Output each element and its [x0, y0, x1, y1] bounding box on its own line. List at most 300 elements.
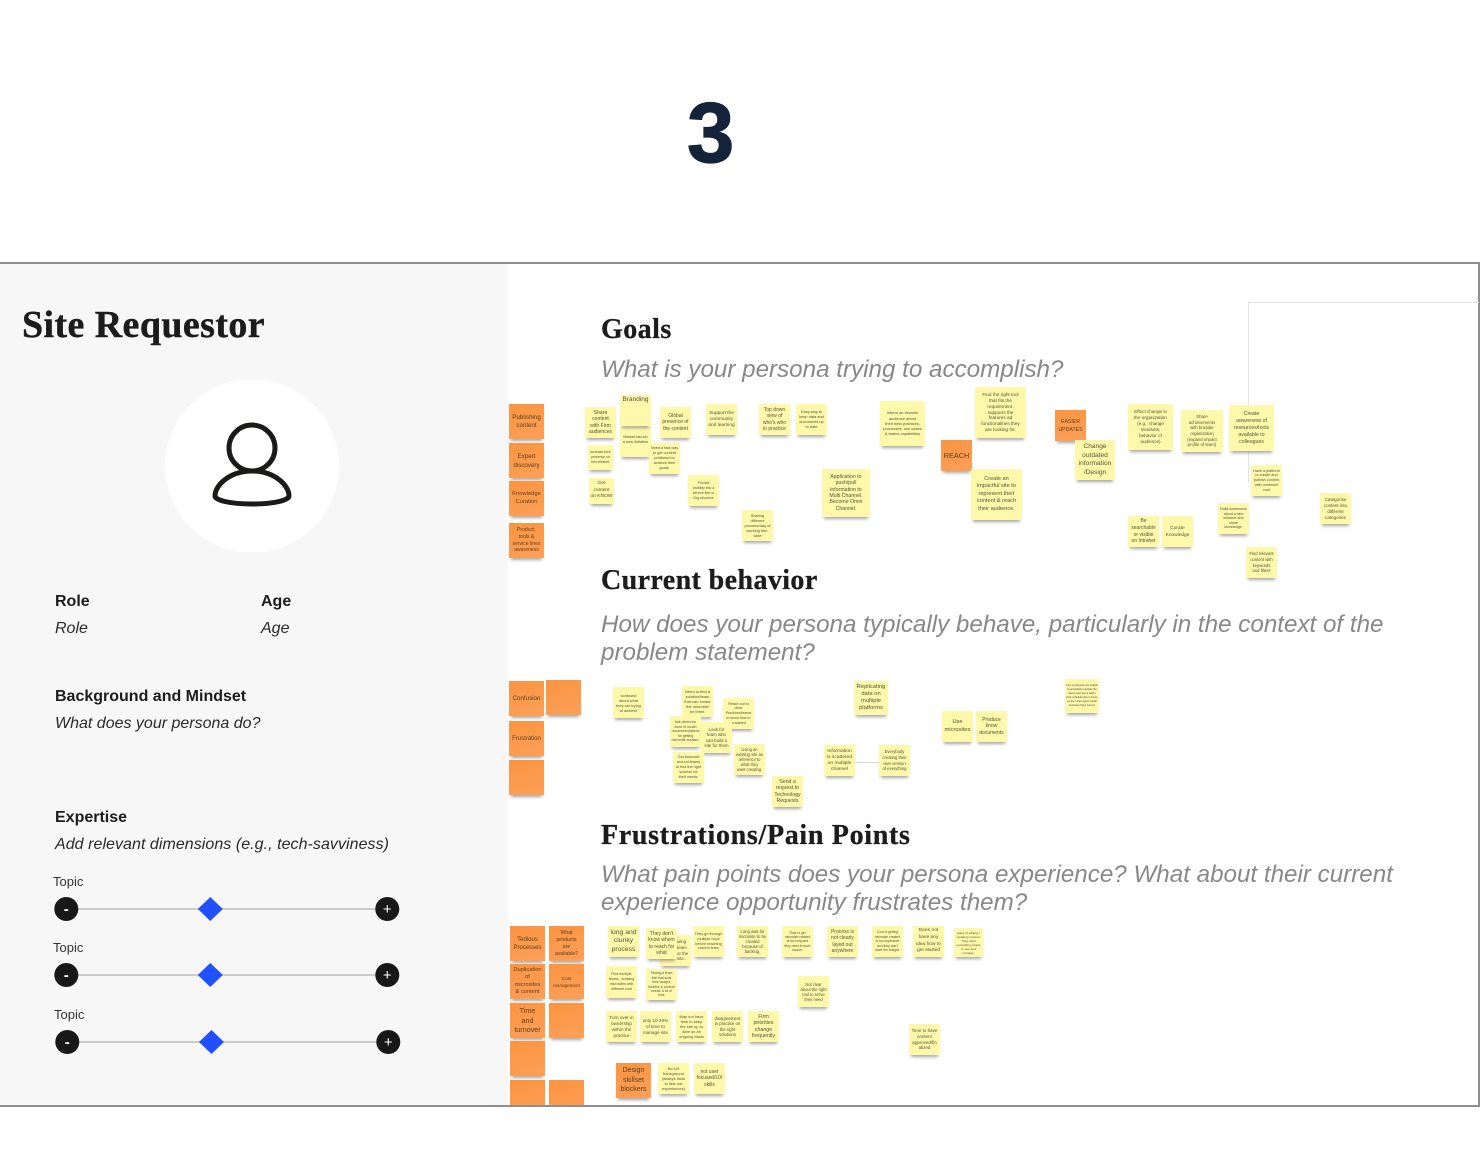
sticky: Finding a team: their budget, — [652, 980, 671, 984]
sticky: only 10-20%: only 10-20% — [643, 1018, 668, 1022]
sticky: Expert discovery: Expert — [518, 452, 535, 460]
sticky: Confusion — [509, 681, 544, 716]
sticky: Reach out: st started — [731, 721, 746, 725]
sticky: Look for team — [701, 722, 732, 753]
sticky: Easy way — [796, 404, 827, 435]
sticky: No UX background: in lists not — [665, 1081, 682, 1086]
text: behavior prompt: How does your persona typically behave, particularly in the context of the problem statement? — [601, 611, 1384, 666]
sticky: Duplication — [510, 964, 545, 999]
sticky: Effect change: mindsets, — [1141, 427, 1160, 432]
sticky: Find multiple teams: microsites with — [610, 982, 633, 986]
sticky: Share content: content — [592, 416, 609, 422]
sticky: May not have time: the site up to — [680, 1024, 703, 1029]
sticky: They go through: before reaching — [695, 942, 722, 946]
sticky: Build awareness: initiative and — [1224, 516, 1243, 520]
sticky: Time and turnover: and — [522, 1016, 534, 1025]
sticky: Ease of editing: something simple — [956, 942, 981, 946]
sticky: Product awareness — [509, 523, 544, 558]
sticky: Curate Knowledge: Curate — [1170, 526, 1185, 530]
sticky: Change outdated: information — [1079, 460, 1111, 467]
sticky: Find the right tool: features ad — [989, 415, 1012, 420]
sticky: Find the right tool: are looking for. — [985, 427, 1016, 432]
sticky: Cost of getting: Cost of getting — [877, 930, 898, 934]
label: topic 2: Topic — [53, 940, 83, 955]
sticky: Provide visibility: service line or — [693, 490, 714, 494]
sticky: long and clunky: clunky — [614, 937, 633, 944]
sticky: Send a request: request to — [776, 785, 799, 791]
sticky: blank orange — [510, 1080, 545, 1115]
sticky: Not clear — [798, 976, 829, 1007]
sticky: Need to find: that can create — [684, 699, 711, 704]
sticky: Find relevant content: Find relevant — [1249, 551, 1274, 556]
sticky: Reach out: to know how to — [726, 716, 750, 720]
sticky: tiny note: their schedule due to focus — [1066, 696, 1098, 699]
sticky: Be searchable: on Intranet — [1132, 538, 1155, 544]
sticky: Time and turnover: Time — [520, 1006, 535, 1015]
sticky: Inform audience: Inform an broader — [887, 410, 918, 415]
sticky: Get bounced: to find the right — [676, 765, 701, 769]
sticky: May not have time: date on an — [682, 1029, 701, 1034]
sticky: Duplication: microsites — [515, 982, 540, 988]
sticky: Share content: Share — [594, 410, 607, 416]
sticky: tiny note — [1065, 679, 1099, 713]
sticky: Design skillset blockers: Design — [623, 1067, 644, 1074]
sticky: blank orange — [549, 1003, 584, 1038]
sticky: Long wait: Long wait for — [740, 929, 764, 934]
sticky: Inform audience — [880, 401, 925, 446]
sticky: Firm priorities: Firm — [758, 1014, 769, 1020]
sticky: Does not have any idea: idea how to — [916, 942, 941, 946]
sticky: disagreement: disagreement — [714, 1016, 741, 1020]
sticky: Long wait: because of — [742, 944, 763, 949]
sticky: Reach out: Practices/teams — [726, 711, 751, 715]
sticky: Have a platform: with minimum — [1255, 483, 1278, 487]
sticky: Find multiple teams — [606, 966, 637, 998]
sticky: They don't know — [646, 928, 677, 959]
slider: topic 1: - — [64, 901, 69, 918]
sticky: Publishing content: Publishing — [512, 414, 541, 420]
sticky: Turn over: ownership — [611, 1020, 632, 1026]
sticky: They don't know: know whom — [648, 937, 675, 943]
sticky: team note behind: or the — [677, 950, 688, 956]
sticky: Curate Knowledge: Knowledge — [1166, 532, 1189, 538]
sticky: Long wait: backlog. — [745, 949, 760, 954]
sticky: Share content: with Firm — [590, 422, 611, 428]
sticky: Cost management: Cost — [562, 976, 571, 980]
sticky: Does not have any idea: get started — [917, 948, 940, 953]
sticky: Time to get — [782, 926, 813, 957]
sticky: confused: to achieve — [620, 708, 637, 712]
sticky: blank orange — [549, 1080, 584, 1115]
sticky: Send a request: Requests — [777, 798, 798, 804]
sticky: Time to have content: Time to have — [912, 1028, 937, 1033]
sticky: They go through: multiple hops — [697, 937, 720, 941]
sticky: Turn over: within the — [612, 1026, 631, 1032]
sticky: Time to have content — [909, 1024, 940, 1055]
label: Background and Mindset: Background and Mindset — [55, 688, 246, 705]
sticky: Market launch: Market launch — [623, 434, 648, 439]
sticky: Finding a team: Finding a team — [651, 971, 672, 975]
sticky: Time to get: Time to get — [789, 931, 806, 935]
sticky: They don't know: what — [656, 950, 667, 956]
panel: persona frame — [0, 262, 1480, 1107]
slider: topic 1: + — [383, 901, 392, 918]
sticky: They don't know: They don't — [650, 930, 673, 936]
sticky: Time to have content: alized — [919, 1045, 930, 1050]
panel: behavior sticky notes — [509, 679, 1099, 811]
sticky: Share content: audiences — [589, 429, 612, 435]
sticky: Need to find: for them. — [690, 709, 705, 714]
sticky: Share achievements — [1181, 410, 1223, 452]
sticky: Market launch: a new initiative — [623, 439, 648, 444]
sticky: Effect change: the organization — [1134, 415, 1167, 420]
sticky: No UX background: experiences) — [662, 1086, 685, 1091]
sticky: Produce know documents: know — [986, 723, 997, 729]
text: expertise prompt: Add relevant dimensions (e.g., tech-savviness) — [55, 836, 389, 853]
sticky: Using existing site: Using an — [741, 747, 758, 752]
sticky: Ask others: microsite created. — [672, 738, 699, 742]
sticky: Sharing processes — [742, 510, 773, 541]
sticky: Curate Knowledge — [1162, 516, 1193, 547]
sticky: Reach out: Reach out to — [728, 702, 749, 706]
sticky: Get bounced: around teams — [677, 760, 700, 764]
sticky: Time to get: microsite created — [785, 935, 810, 939]
sticky: Product awareness: tools & — [519, 534, 534, 540]
sticky: Create impactful site: impactful site to — [977, 483, 1016, 489]
sticky: Get content: Get — [598, 481, 605, 486]
sticky: Get bounced: solution for — [679, 770, 698, 774]
sticky: Support community — [706, 404, 737, 435]
sticky: Duplication: Duplication — [513, 967, 542, 973]
sticky: Confusion: Confusion — [513, 694, 540, 702]
sticky: Top down view: Top down — [764, 406, 785, 412]
sticky: Increase presence: presence on — [591, 455, 610, 459]
sticky: Design skillset blockers — [616, 1063, 651, 1098]
text: pain points prompt: What pain points does your persona experience? What about their current experience opportunity frustrates them? — [601, 861, 1393, 916]
sticky: only 10-20% — [640, 1011, 671, 1042]
sticky: Build awareness: knowledge. — [1224, 525, 1243, 529]
sticky: tiny note: Firm employees are unable — [1066, 684, 1098, 687]
sticky: Top down view: who's who — [763, 420, 786, 426]
sticky: What products: are — [563, 944, 570, 950]
sticky: Need a fast way: published to — [654, 456, 675, 460]
sticky: Replicating data: data on — [861, 691, 881, 697]
sticky: Inform audience: processes, use cases — [883, 426, 922, 431]
heading: Goals: Goals — [601, 314, 672, 344]
sticky: tiny note: to accurately maintain the — [1067, 688, 1097, 691]
sticky: Tedious Processes — [510, 926, 545, 961]
sticky: disagreement: solutions — [719, 1032, 736, 1037]
sticky: Cost management: management — [553, 982, 580, 988]
sticky: Branding — [620, 395, 651, 426]
sticky: Cost of getting — [872, 926, 903, 957]
panel: persona sidebar — [0, 264, 508, 1105]
sticky: tiny note: latest open items within — [1069, 692, 1095, 695]
sticky: Be searchable: or visible — [1134, 532, 1153, 538]
sticky: Long wait: microsite to be — [739, 934, 766, 939]
sticky: Look for team: can build a — [706, 738, 727, 742]
sticky: Inform audience: their best practices, — [885, 421, 920, 426]
panel: goals sticky notes — [509, 387, 1351, 582]
sticky: Provide visibility — [688, 475, 719, 506]
sticky: Top down view — [759, 404, 790, 435]
sticky: blank orange — [509, 760, 544, 795]
sticky: No UX background: No UX — [668, 1066, 679, 1071]
sticky: Ask others: word of mouth — [674, 725, 697, 729]
sticky: Long wait: created — [746, 939, 759, 944]
sticky: Cost management — [549, 964, 584, 999]
sticky: Application omni channel: Application to — [830, 474, 862, 480]
sticky: Application omni channel: information to — [830, 487, 862, 493]
sticky: Information scattered: on multiple — [828, 760, 851, 766]
sticky: Firm priorities: frequently — [752, 1033, 775, 1039]
sticky: Get bounced — [673, 752, 704, 783]
sticky: Cost of getting: and they don't — [877, 944, 898, 948]
sticky: Product awareness: Product, — [517, 527, 536, 533]
sticky: Process not clear: layed out — [832, 942, 853, 948]
sticky: They go through: They go through — [695, 932, 722, 936]
sticky: Duplication: of — [525, 974, 530, 980]
sticky: Find the right tool: requirement, — [987, 404, 1014, 409]
sticky: Look for team: Look for — [709, 727, 724, 732]
sticky: Not clear: about the right — [800, 986, 827, 992]
sticky: Create awareness: resources/tools — [1234, 424, 1269, 430]
sticky: Inform audience: audience about — [889, 416, 916, 421]
sticky: Increase presence — [588, 445, 613, 470]
sticky: Knowledge Curation: Knowledge — [512, 491, 541, 497]
sticky: Global presence: Global — [668, 413, 683, 419]
sticky: Have a platform: to create and — [1255, 473, 1278, 477]
sticky: Support community: Support the — [709, 410, 734, 416]
sticky: They don't know: to reach for — [649, 944, 674, 950]
sticky: Application omni channel: Channel. — [836, 506, 856, 512]
sticky: Ask others: recommendations — [672, 729, 699, 733]
connector — [855, 762, 879, 763]
sticky: Have a platform: cost — [1263, 488, 1270, 492]
sticky: Frustration: Frustration — [512, 736, 541, 742]
sticky: Not clear: tool to serve — [802, 992, 825, 996]
sticky: Use microsites: Use — [952, 719, 963, 725]
sticky: Produce know documents: documents — [979, 730, 1004, 736]
sticky: Have a platform — [1251, 465, 1282, 496]
sticky: Send a request: Send a — [779, 779, 796, 785]
label: topic 1: Topic — [53, 874, 83, 889]
sticky: EASIER UPDATES: UPDATES — [1058, 426, 1083, 432]
sticky: Using existing site: existing site as — [736, 752, 763, 757]
sticky: Application omni channel — [822, 469, 870, 517]
sticky: Produce know documents: Produce — [982, 717, 1001, 723]
sticky: Reach out — [723, 698, 754, 729]
sticky: Change outdated: outdated — [1082, 452, 1108, 458]
sticky: EASIER UPDATES: EASIER — [1061, 418, 1080, 424]
sticky: Finding a team: that that suits — [652, 976, 671, 980]
sticky: Look for team: team who — [707, 732, 726, 737]
sticky: Ease of editing — [954, 928, 983, 957]
sticky: Sharing processes: Sharing — [751, 513, 764, 518]
sticky: Categorise content — [1320, 493, 1351, 524]
sticky: Information scattered — [824, 745, 855, 776]
sticky: Send a request: Technology — [774, 792, 801, 798]
sticky: Easy way: documents up — [799, 419, 824, 424]
sticky: Categorise content: content into — [1324, 502, 1347, 508]
sticky: disagreement — [712, 1011, 743, 1042]
sticky: Build awareness — [1218, 503, 1249, 534]
sticky: disagreement: the right — [720, 1026, 735, 1032]
sticky: Need to find — [682, 686, 713, 717]
sticky: Provide visibility: visibility into a — [693, 486, 714, 490]
sticky: Find relevant content: and filters — [1252, 568, 1271, 573]
sticky: Get content — [589, 478, 614, 504]
sticky: Effect change: (e.g., change — [1137, 421, 1164, 426]
sticky: Branding: Branding — [622, 396, 649, 403]
sticky: Using existing site — [734, 744, 765, 775]
sticky: Get bounced: their needs. — [679, 775, 698, 779]
sticky: Support community: and learning — [708, 422, 735, 428]
sticky: Replicating data: Replicating — [857, 684, 885, 690]
sticky: Market launch — [620, 427, 651, 457]
sticky: Cost of getting: is too expensive — [876, 939, 899, 943]
sticky: Have a platform: Have a platform — [1253, 468, 1280, 472]
faint selection box — [1248, 302, 1479, 483]
sticky: Share achievements: achievements — [1189, 420, 1215, 425]
sticky: Time to have content: approved/fin — [912, 1040, 937, 1044]
sticky: Time to get: sooner. — [792, 948, 803, 952]
sticky: Build awareness: share — [1229, 521, 1238, 525]
sticky: Does not have any idea: have any — [919, 935, 938, 940]
sticky: Effect change — [1128, 404, 1173, 450]
sticky: Find the right tool: that fits the — [989, 398, 1012, 403]
sticky: Get content: on KNOW — [590, 494, 612, 499]
sticky: Time and turnover: turnover — [514, 1025, 541, 1034]
sticky: Everybody creating: Everybody — [885, 749, 904, 754]
sticky: Ask others — [670, 716, 701, 747]
label: topic 3: Topic — [54, 1007, 84, 1022]
sticky: Sharing processes: working firm- — [746, 528, 769, 533]
sticky: Need a fast way: goals. — [659, 466, 670, 470]
sticky: Create awareness: available to — [1238, 432, 1265, 438]
sticky: Categorise content: Categorise — [1325, 496, 1346, 502]
sticky: Create awareness: colleagues — [1239, 438, 1264, 444]
slider: topic 2: + — [383, 967, 392, 984]
sticky: Cost of getting: have the budget. — [875, 948, 900, 952]
sticky: Be searchable: Be — [1140, 518, 1147, 524]
sticky: confused: confused — [621, 692, 636, 698]
sticky: EASIER UPDATES — [1055, 410, 1086, 441]
sticky: Ease of editing: They want — [961, 938, 976, 942]
slider: topic 3: - — [65, 1034, 70, 1051]
sticky: Find relevant content: content with — [1250, 557, 1273, 562]
sticky: not user focused — [694, 1063, 725, 1094]
sticky: Everybody creating: creating their — [882, 755, 907, 760]
slider: topic 3: + — [384, 1034, 393, 1051]
heading: Frustrations/Pain Points: Frustrations/Pain Points — [601, 820, 911, 850]
sticky: Get content: content — [593, 488, 610, 493]
sticky: Find multiple teams: Find multiple — [611, 972, 632, 976]
sticky: Application omni channel: Become Omni — [830, 499, 862, 505]
sticky: Effect change: Effect change in — [1134, 409, 1167, 414]
sticky: Tedious Processes: Tedious — [517, 936, 538, 942]
sticky: Change outdated: /Design — [1084, 468, 1106, 476]
sticky: Firm priorities: change — [755, 1026, 772, 1032]
sticky: Need a fast way: achieve their — [654, 461, 675, 465]
sticky: Turn over: Turn over in — [609, 1014, 634, 1020]
sticky: Design skillset blockers: skillset — [623, 1077, 644, 1084]
sticky: Firm priorities: priorities — [753, 1020, 774, 1026]
slider: topic 3 — [55, 1030, 400, 1054]
sticky: Design skillset blockers: blockers — [620, 1086, 647, 1093]
sticky: confused: they are trying — [616, 702, 641, 708]
sticky: What products: products — [557, 936, 576, 942]
sticky: Create impactful site: their audience. — [978, 506, 1015, 512]
sticky: Publishing content — [509, 404, 544, 439]
sticky: May not have time: May not have — [679, 1014, 704, 1019]
panel: pain point sticky notes — [510, 926, 983, 1105]
sticky: Time to have content: content — [917, 1034, 932, 1039]
sticky: Top down view: view of — [767, 413, 782, 419]
sticky: Categorise content: categories — [1325, 514, 1346, 520]
sticky: Using existing site: want creating. — [737, 767, 762, 772]
sticky: May not have time: ongoing basis — [679, 1034, 704, 1039]
sticky: Share achievements: organization — [1190, 431, 1214, 436]
sticky: Produce know documents — [976, 711, 1007, 742]
text: goals prompt: What is your persona trying to accomplish? — [601, 356, 1063, 383]
sticky: Finding a team: timeline & content — [648, 984, 675, 988]
sticky: long and clunky: long and — [610, 929, 637, 936]
sticky: Does not have any idea: Does not — [919, 928, 938, 933]
sticky: Change outdated — [1075, 440, 1115, 480]
sticky: Build awareness: about a new — [1224, 512, 1243, 516]
sticky: Create awareness: awareness of — [1236, 418, 1267, 424]
sticky: Ease of editing: to use and — [961, 946, 976, 950]
sticky: only 10-20%: manage site — [643, 1030, 668, 1034]
sticky: Ease of editing: manage. — [962, 950, 975, 954]
sticky: team note behind: site. — [677, 956, 685, 961]
sticky: Finding a team: time — [658, 993, 665, 997]
sticky: Frustration — [509, 721, 544, 756]
icon: avatar — [212, 422, 292, 506]
sticky: Find relevant content — [1246, 547, 1277, 578]
sticky: Find the right tool — [975, 387, 1026, 438]
sticky: Use microsites — [942, 711, 973, 742]
slider: topic 2 — [54, 963, 400, 987]
sticky: What products: available? — [555, 950, 578, 956]
sticky: Find the right tool: supports the — [988, 410, 1013, 415]
sticky: Build awareness: Build awareness — [1220, 507, 1247, 511]
sticky: Find the right tool: Find the right tool — [982, 392, 1019, 397]
sticky: Ask others: Ask others for — [675, 720, 696, 724]
heading: Site Requestor: Site Requestor — [22, 304, 265, 346]
sticky: team note behind: wing — [677, 939, 686, 944]
sticky: Process not clear: Process is — [831, 928, 854, 934]
sticky: Sharing processes: wide — [753, 533, 762, 538]
sticky: What products — [549, 926, 584, 961]
sticky: Expert discovery — [509, 443, 544, 478]
sticky: Need to find: the microsite — [686, 704, 709, 709]
sticky: Need a fast way: Need a fast way — [651, 446, 678, 450]
sticky: Everybody creating: own version — [883, 760, 906, 766]
sticky: tiny note: and keep them current — [1069, 704, 1095, 707]
sticky: Ease of editing: updating content. — [957, 934, 980, 938]
sticky: Support community: community — [710, 416, 733, 422]
sticky: Find multiple teams: teams , creating — [609, 977, 634, 981]
sticky: not user focused: skills — [704, 1082, 715, 1088]
sticky: May not have time — [676, 1011, 707, 1042]
sticky: Time to get: they need it much — [784, 944, 811, 948]
slider: topic 1 — [54, 897, 400, 921]
sticky: Create awareness — [1229, 405, 1274, 451]
sticky: Replicating data: platforms — [859, 705, 883, 711]
sticky: Easy way: Easy way to — [801, 409, 822, 414]
